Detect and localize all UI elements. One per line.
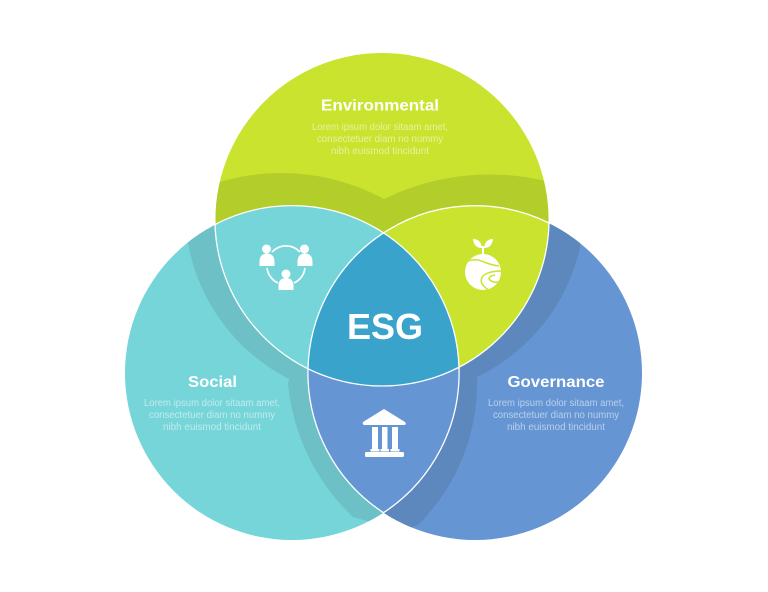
circle: environmental: [216, 53, 548, 386]
text block: Social description: nibh euismod tincidunt: [163, 422, 261, 433]
circle: social: [125, 206, 459, 540]
ESG venn diagram: [125, 53, 642, 540]
text block: Governance description: Lorem ipsum dolor sitaam amet,: [488, 398, 624, 409]
shadow band: governance: [384, 224, 580, 528]
overlap: environmental and social: [215, 206, 384, 369]
text block: Social description: consectetuer diam no nummy: [149, 410, 275, 421]
circle: governance: [308, 206, 642, 540]
heading: Social: Social: [188, 374, 237, 391]
icon: globe with sprout: [465, 239, 501, 290]
overlap: center: [308, 233, 459, 387]
text block: Environmental description: consectetuer diam no nummy: [317, 134, 443, 145]
text block: Environmental description: [312, 122, 448, 157]
icon: people network: [260, 244, 312, 290]
text block: Social description: Lorem ipsum dolor sitaam amet,: [144, 398, 280, 409]
overlap: social and governance: [308, 368, 459, 513]
overlap: environmental and governance: [384, 206, 549, 368]
text block: Environmental description: nibh euismod tincidunt: [331, 146, 429, 157]
center label: ESG: ESG: [347, 306, 423, 347]
shadow band: social: [188, 225, 383, 522]
text block: Social description: [144, 398, 280, 433]
heading: Governance: Governance: [508, 374, 605, 391]
shadow band: environmental: [216, 173, 548, 232]
white overlap outlines: [215, 206, 549, 513]
text block: Governance description: consectetuer diam no nummy: [493, 410, 619, 421]
text block: Environmental description: Lorem ipsum dolor sitaam amet,: [312, 122, 448, 133]
text block: Governance description: [488, 398, 624, 433]
text block: Governance description: nibh euismod tincidunt: [507, 422, 605, 433]
heading: Environmental: Environmental: [321, 98, 439, 114]
icon: government building: [363, 409, 406, 457]
